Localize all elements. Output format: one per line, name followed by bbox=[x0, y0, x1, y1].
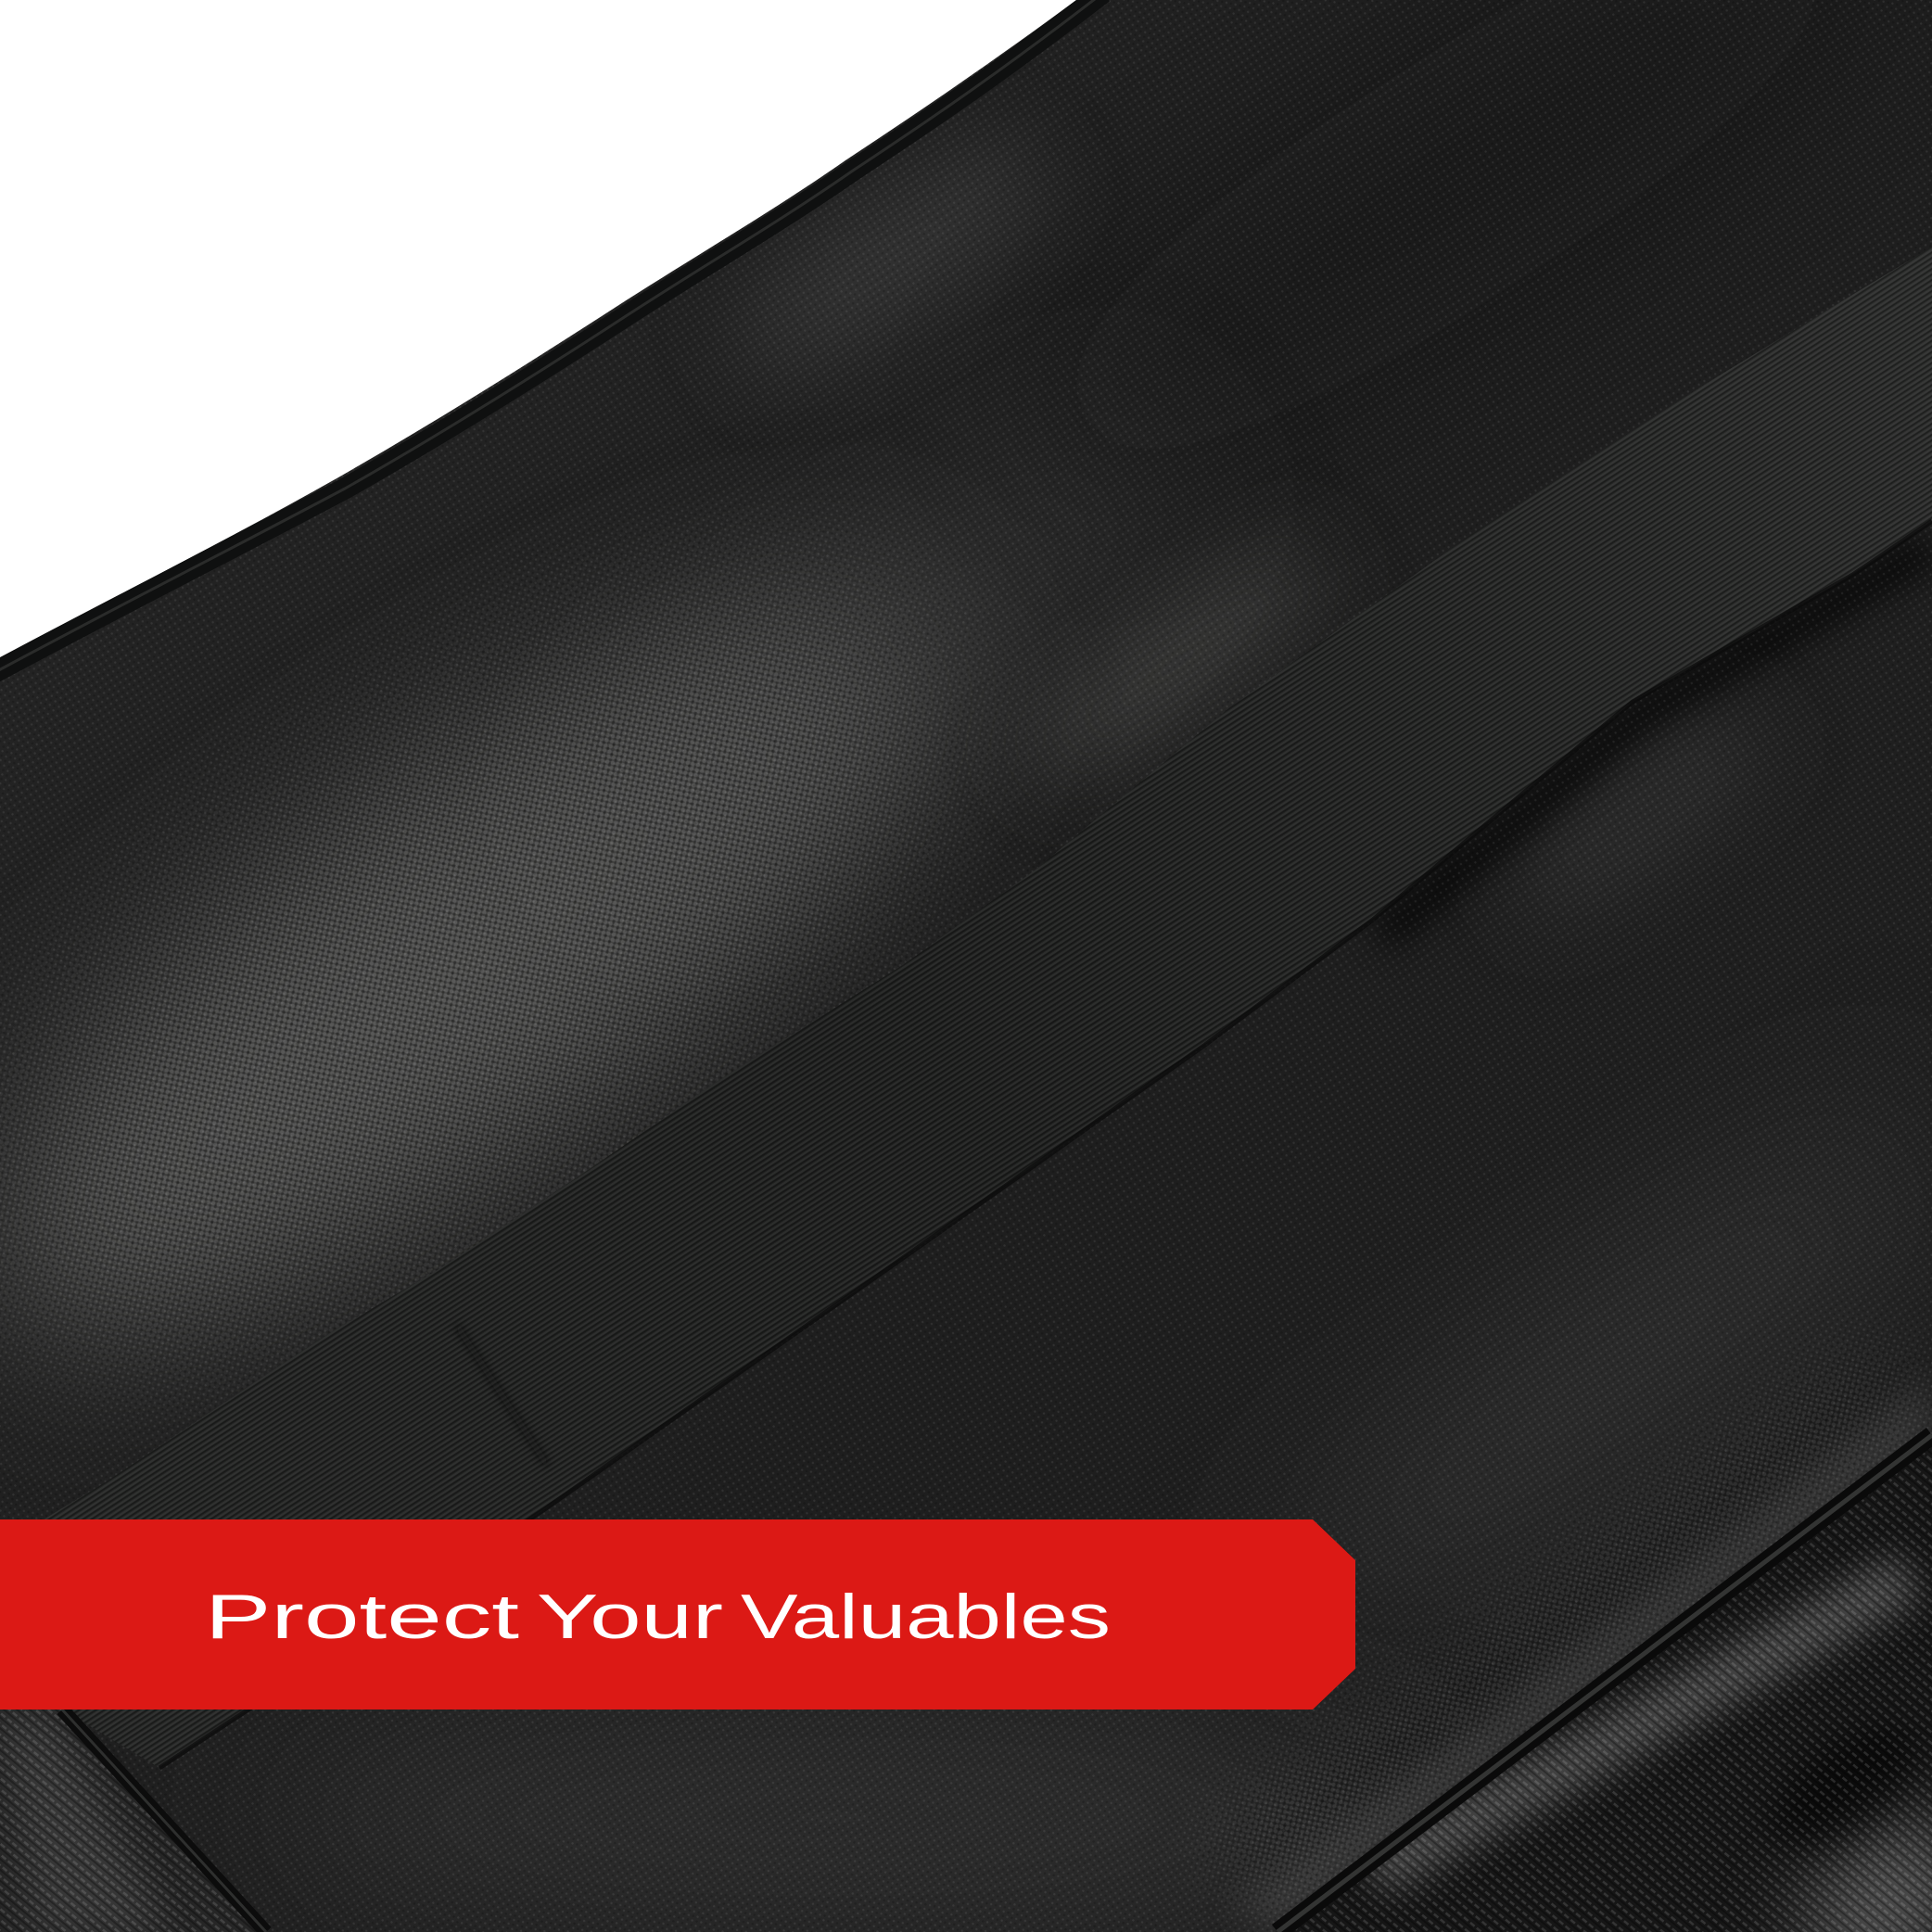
top edge piping bbox=[0, 0, 1103, 680]
bottom-right side panel bbox=[1277, 1435, 1932, 1932]
red banner bbox=[0, 1519, 1355, 1710]
banner heading: Valuables bbox=[741, 1582, 1111, 1652]
bottom-left side panel bbox=[0, 1710, 266, 1932]
bottom-right piping bbox=[1277, 1435, 1932, 1932]
bottom-left piping bbox=[62, 1710, 266, 1932]
strap stitching bbox=[457, 1326, 547, 1465]
banner heading: Protect bbox=[205, 1582, 519, 1652]
webbing strap bbox=[0, 247, 1932, 1768]
banner shape bbox=[0, 1519, 1355, 1710]
banner heading bbox=[205, 1582, 1111, 1652]
banner heading: Your bbox=[537, 1582, 723, 1652]
